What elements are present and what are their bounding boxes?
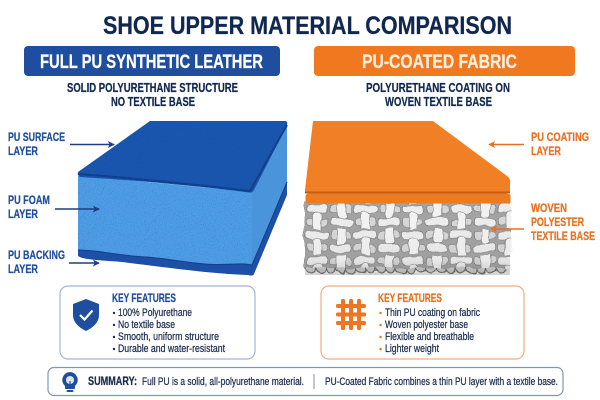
diagram: coated fabric block (304, 121, 511, 275)
label: PU surface layer: LAYER (8, 144, 38, 158)
key features text: full PU (112, 291, 225, 355)
arrow: PU foam layer (55, 208, 99, 210)
label: PU surface layer (8, 130, 65, 158)
label: PU coating layer: LAYER (531, 144, 561, 158)
key features text: full PU: Durable and water-resistant (118, 343, 225, 355)
arrow: woven textile base (491, 228, 524, 230)
right side face (252, 125, 287, 266)
summary text: full PU: Full PU is a solid, all-polyurethane material. (142, 376, 304, 388)
backing layer (78, 182, 287, 276)
diagram: full PU layered block (78, 121, 287, 276)
key features text: PU-coated: Flexible and breathable (385, 331, 474, 343)
arrow: PU surface layer (70, 144, 114, 146)
key features text: full PU: No textile base (118, 319, 175, 331)
label: PU foam layer (8, 193, 50, 221)
key features card: PU-coated (321, 286, 524, 359)
label: woven polyester textile base (531, 201, 595, 243)
key features text: full PU: 100% Polyurethane (118, 307, 192, 319)
subheading: full PU (67, 81, 238, 109)
label: PU foam layer: PU FOAM (8, 193, 50, 207)
label: PU backing layer: LAYER (8, 262, 38, 276)
label: PU backing layer (8, 248, 65, 276)
lower coating strip (306, 194, 510, 204)
key features text: PU-coated: Thin PU coating on fabric (385, 307, 480, 319)
summary bar (48, 368, 563, 396)
heading banner: full PU: FULL PU SYNTHETIC LEATHER (40, 51, 263, 73)
heading banner: full PU (24, 46, 280, 76)
summary label: SUMMARY: (88, 376, 137, 388)
label: PU foam layer: LAYER (8, 207, 38, 221)
label: PU coating layer (531, 130, 589, 158)
key features text: full PU: KEY FEATURES (112, 291, 176, 305)
label: woven polyester textile base: WOVEN (531, 201, 567, 215)
heading banner: PU-coated: PU-COATED FABRIC (362, 51, 517, 73)
subheading: full PU: SOLID POLYURETHANE STRUCTURE (67, 81, 238, 95)
label: PU backing layer: PU BACKING (8, 248, 65, 262)
arrow: PU backing layer (69, 262, 99, 264)
key features text: PU-coated (378, 291, 480, 355)
woven textile base (304, 201, 511, 275)
heading banner: PU-coated (314, 46, 575, 76)
key features card: full PU (60, 286, 255, 359)
surface layer (78, 121, 287, 193)
key features text: full PU: Smooth, uniform structure (118, 331, 219, 343)
subheading: PU-coated (366, 81, 510, 109)
key features text: PU-coated: Woven polyester base (385, 319, 468, 331)
subheading: PU-coated: WOVEN TEXTILE BASE (385, 95, 492, 109)
subheading: full PU: NO TEXTILE BASE (111, 95, 195, 109)
icon: shield with check (73, 299, 99, 331)
foam layer (78, 176, 252, 268)
subheading: PU-coated: POLYURETHANE COATING ON (366, 81, 510, 95)
panel: full PU synthetic leather (8, 46, 287, 359)
PU coating layer (305, 121, 510, 194)
title: SHOE UPPER MATERIAL COMPARISON (103, 12, 512, 40)
key features text: PU-coated: Lighter weight (385, 343, 439, 355)
panel: PU-coated fabric (304, 46, 595, 359)
icon: light bulb (62, 372, 78, 392)
icon: woven grid (336, 299, 366, 330)
key features text: PU-coated: KEY FEATURES (378, 291, 442, 305)
arrow: PU coating layer (489, 144, 524, 146)
label: PU surface layer: PU SURFACE (8, 130, 65, 144)
